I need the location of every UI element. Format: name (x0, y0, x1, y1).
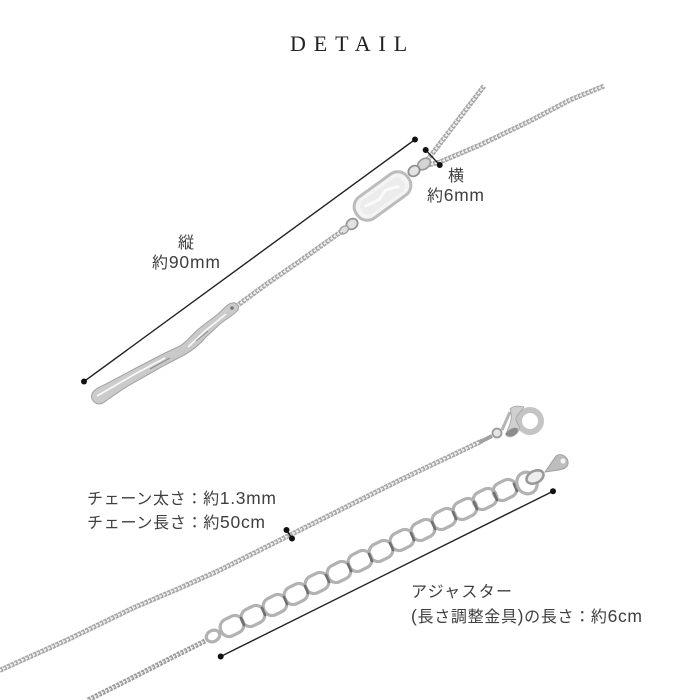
teardrop charm (545, 455, 568, 472)
long chain (0, 441, 482, 672)
wavy bar charm (92, 303, 239, 404)
lobster clasp (502, 406, 541, 437)
small jump ring (492, 428, 502, 438)
label: width: 横 (448, 167, 464, 185)
label: chain specs: チェーン太さ：約1.3mm (87, 488, 276, 508)
label: adjuster: (長さ調整金具)の長さ：約6cm (411, 606, 642, 626)
label: length: 縦 (178, 234, 194, 252)
chain end cap (480, 436, 492, 442)
double end ring (513, 468, 546, 497)
dimension line: adjuster (218, 488, 556, 660)
middle chain (238, 231, 342, 305)
long chain with clasp (0, 406, 541, 672)
fine chain tail (88, 641, 205, 700)
label: width: 約6mm (427, 185, 484, 205)
label: chain specs: チェーン長さ：約50cm (87, 512, 265, 532)
oval stone pendant (349, 167, 416, 225)
first small link (204, 628, 222, 644)
upper chain: left strand (424, 86, 484, 164)
label: length: 約90mm (152, 252, 220, 272)
lower connector beads (338, 216, 360, 236)
label: adjuster: アジャスター (411, 583, 512, 601)
link junction shadows (241, 484, 517, 625)
top connector beads (406, 156, 433, 179)
large links (217, 477, 520, 639)
pendant necklace photo (92, 86, 604, 404)
label: width (427, 167, 484, 205)
label: chain specs (87, 488, 276, 532)
label: length (152, 234, 220, 272)
title: DETAIL (290, 31, 415, 56)
upper chain: right strand (424, 86, 604, 166)
dimension line: length (81, 136, 418, 384)
label: adjuster (411, 583, 642, 626)
adjuster chain (88, 455, 568, 700)
chain thickness marker (284, 527, 295, 542)
dimension line: width (423, 147, 443, 168)
